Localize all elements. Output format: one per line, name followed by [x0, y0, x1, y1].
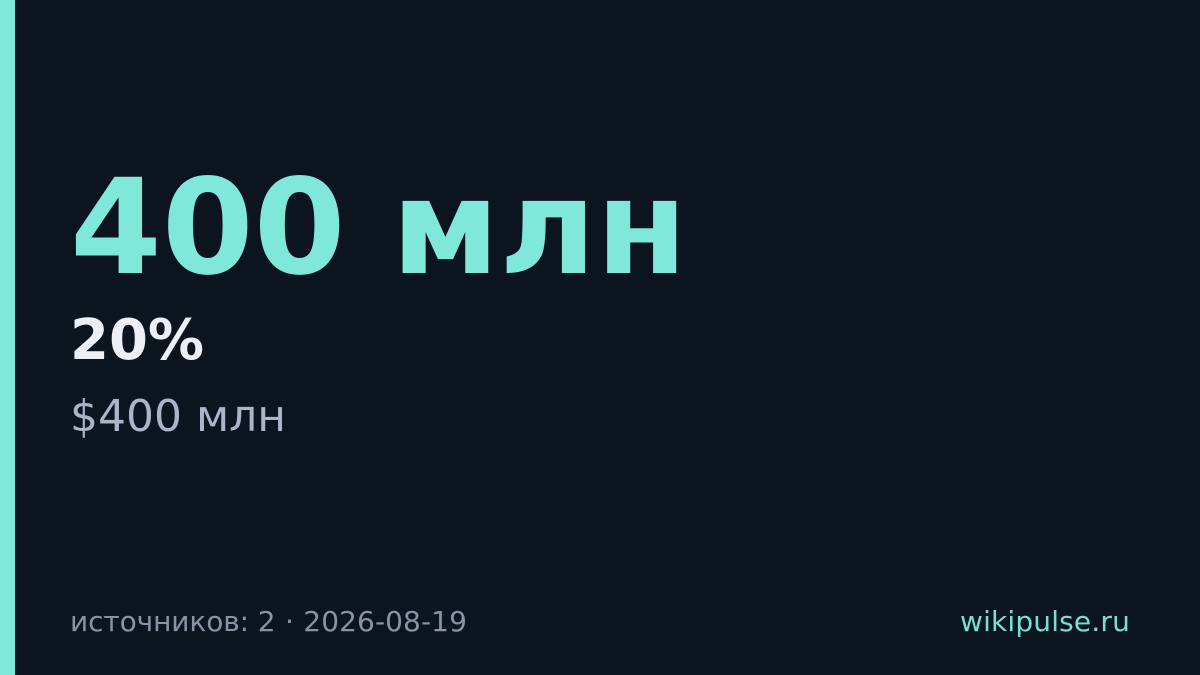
sources and date: источников: 2 · 2026-08-19 [70, 605, 467, 638]
site name: wikipulse.ru [960, 605, 1130, 638]
accent bar [0, 0, 15, 675]
headline value: 400 млн [70, 151, 687, 305]
secondary value: $400 млн [70, 391, 286, 442]
percentage: 20% [70, 308, 204, 373]
